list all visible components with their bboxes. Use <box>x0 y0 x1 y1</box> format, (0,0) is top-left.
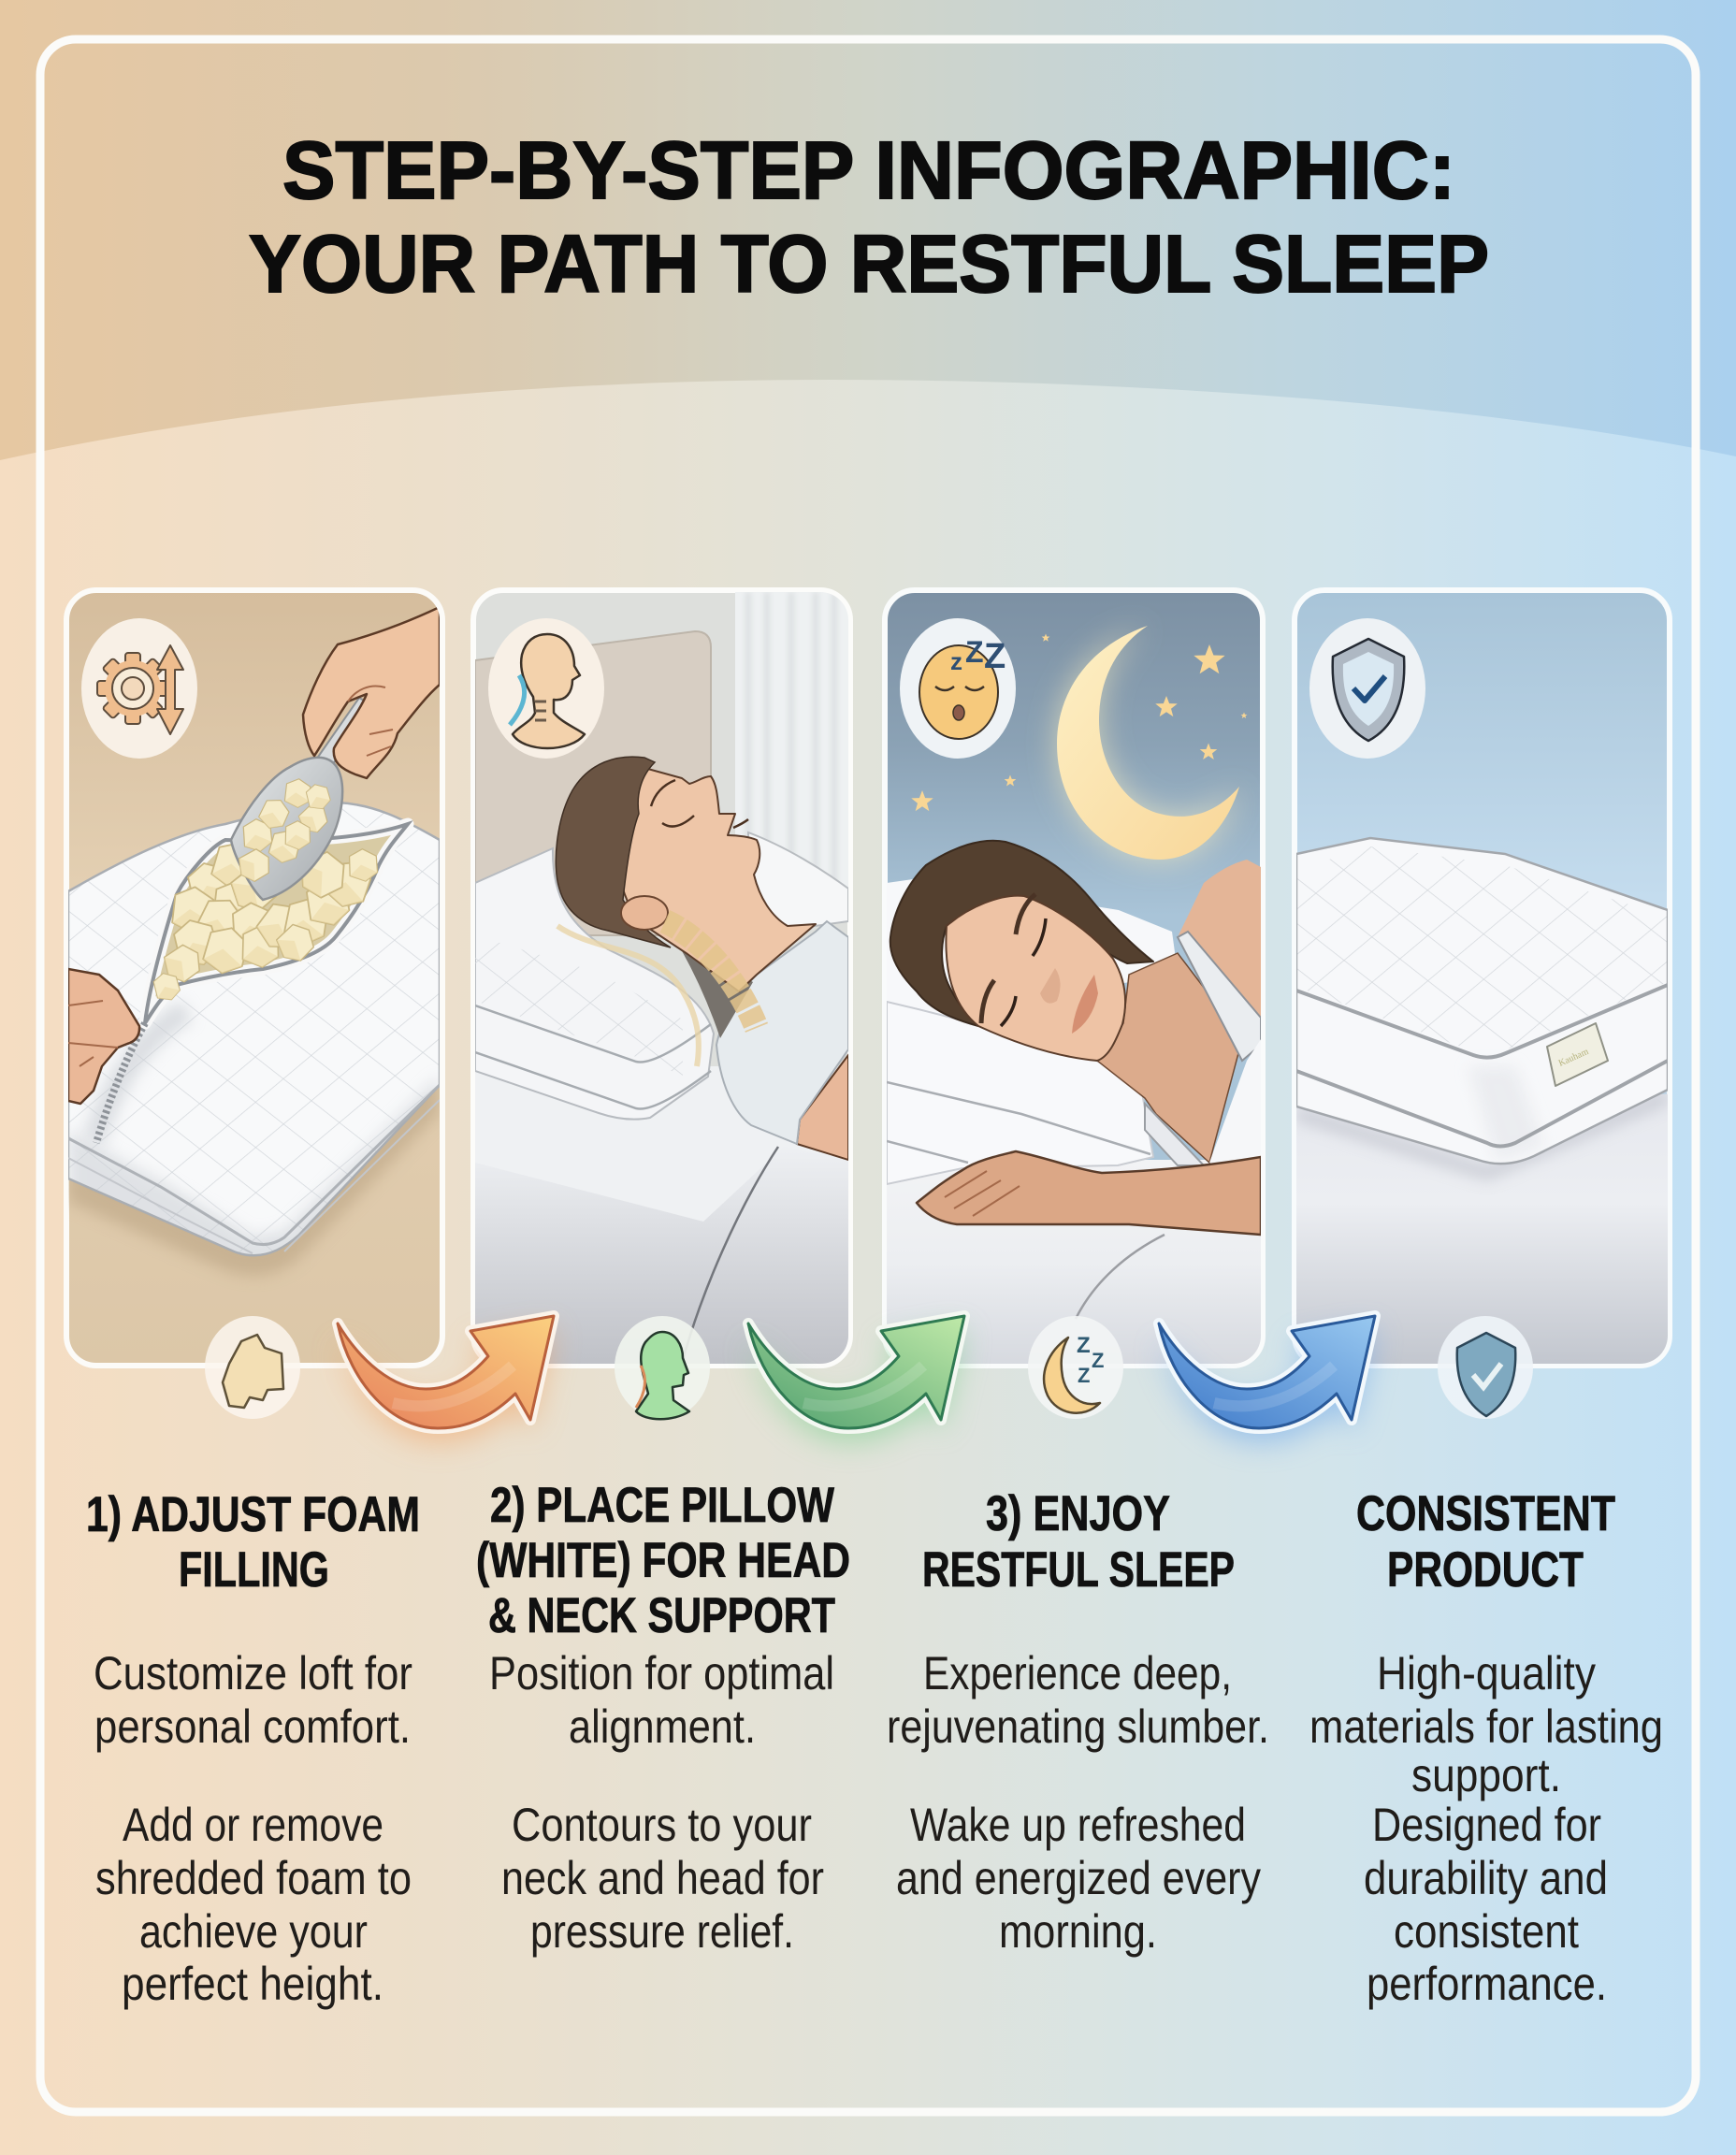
arrow: step 3 to step 4 <box>1159 1316 1375 1441</box>
panel: consistent product <box>1295 590 1670 1366</box>
title: STEP-BY-STEP INFOGRAPHIC: <box>282 125 1455 216</box>
heading: step 2: & NECK SUPPORT <box>488 1588 835 1643</box>
arrow: step 1 to step 2 <box>338 1316 554 1441</box>
icon: sleeping face: z <box>950 647 962 675</box>
bed <box>887 1160 1261 1366</box>
text block: step 3: Wake up refreshed <box>910 1799 1246 1851</box>
hand: lower left <box>68 969 139 1104</box>
heading: step 1 <box>86 1487 420 1598</box>
text block: step 1: Customize loft for <box>94 1647 412 1699</box>
pillow <box>887 878 1178 1184</box>
text block: step 2 <box>489 1647 834 1958</box>
heading: step 3: RESTFUL SLEEP <box>922 1542 1235 1598</box>
icon: sleeping face <box>900 618 1016 759</box>
heading: consistent product: CONSISTENT <box>1356 1486 1615 1541</box>
spine overlay <box>665 921 757 1028</box>
person: head, neck and hair <box>556 757 816 1038</box>
heading: step 1: 1) ADJUST FOAM <box>86 1487 420 1542</box>
icon: foam chunk badge <box>205 1316 300 1419</box>
text block: consistent product: Designed for <box>1372 1799 1601 1851</box>
icon: sleeping face: Z <box>965 635 984 669</box>
scoop with foam <box>231 698 369 900</box>
text block: consistent product: High-quality <box>1377 1647 1596 1699</box>
text block: step 3: rejuvenating slumber. <box>887 1700 1269 1753</box>
bed sheet <box>475 1066 848 1366</box>
icon: head and neck <box>488 618 604 759</box>
heading: consistent product <box>1356 1486 1615 1598</box>
woman: hair <box>890 841 1153 1026</box>
text block: consistent product: materials for lasting <box>1309 1700 1663 1753</box>
icon: shield badge <box>1438 1316 1533 1419</box>
heading: step 2 <box>476 1478 850 1643</box>
text block: step 3: and energized every <box>896 1852 1261 1904</box>
product pillow <box>1296 838 1668 1173</box>
text block: step 2: pressure relief. <box>530 1905 794 1958</box>
text block: step 1: Add or remove <box>123 1799 383 1851</box>
heading: step 3: 3) ENJOY <box>986 1486 1170 1541</box>
text block: consistent product: performance. <box>1367 1958 1607 2010</box>
product label <box>1547 1023 1608 1086</box>
headboard <box>475 631 711 935</box>
title <box>249 125 1489 310</box>
icon: moon and zzz badge: Z <box>1092 1349 1104 1372</box>
icon: moon and zzz badge: Z <box>1077 1333 1091 1358</box>
text block: step 1: achieve your <box>139 1905 368 1958</box>
heading: step 3 <box>922 1486 1235 1598</box>
text block: step 2: Contours to your <box>512 1799 812 1851</box>
text block: step 3: morning. <box>999 1905 1157 1958</box>
icon: gear and height arrow <box>81 618 197 759</box>
panel: enjoy restful sleep <box>885 590 1263 1366</box>
pillow under head <box>475 848 714 1120</box>
person: t-shirt and arm <box>716 921 848 1160</box>
icon: shield with check <box>1309 618 1425 759</box>
woman: arm and hand <box>917 1151 1261 1235</box>
arrow: step 2 to step 3 <box>748 1316 964 1441</box>
curtain <box>735 592 848 901</box>
moon with glow <box>1057 626 1239 860</box>
product label: Kauham <box>1557 1047 1590 1069</box>
back pillow <box>748 832 848 935</box>
text block: step 1: personal comfort. <box>94 1700 411 1753</box>
text block: step 1: perfect height. <box>122 1958 383 2010</box>
stars <box>911 634 1247 811</box>
icon: sleeping face: Z <box>984 637 1005 676</box>
pillow <box>68 803 440 1272</box>
heading: step 2: 2) PLACE PILLOW <box>490 1478 834 1533</box>
text block: step 3 <box>887 1647 1269 1958</box>
hand: top right <box>303 607 440 778</box>
text block: consistent product: consistent <box>1394 1905 1579 1958</box>
text block: consistent product <box>1309 1647 1663 2010</box>
icon: moon and zzz badge <box>1028 1316 1123 1419</box>
panel: adjust foam filling <box>66 590 442 1366</box>
heading: step 2: (WHITE) FOR HEAD <box>476 1533 850 1588</box>
text block: consistent product: support. <box>1411 1749 1561 1801</box>
text block: step 2: Position for optimal <box>489 1647 834 1699</box>
woman: shoulder, chest and strap <box>1097 860 1261 1165</box>
text block: consistent product: durability and <box>1364 1852 1608 1904</box>
text block: step 1: shredded foam to <box>95 1852 412 1904</box>
icon: moon and zzz badge: Z <box>1078 1364 1090 1387</box>
foam opening with zipper <box>96 824 408 1143</box>
text block: step 1 <box>94 1647 412 2010</box>
bed <box>1296 1094 1668 1366</box>
title: YOUR PATH TO RESTFUL SLEEP <box>249 219 1489 310</box>
heading: step 1: FILLING <box>179 1542 329 1598</box>
heading: consistent product: PRODUCT <box>1387 1542 1584 1598</box>
icon: green head badge <box>615 1316 710 1419</box>
text block: step 2: alignment. <box>569 1700 756 1753</box>
text block: step 3: Experience deep, <box>923 1647 1232 1699</box>
panel: place pillow for head and neck support <box>473 590 850 1366</box>
text block: step 2: neck and head for <box>501 1852 824 1904</box>
woman: face <box>946 894 1125 1061</box>
